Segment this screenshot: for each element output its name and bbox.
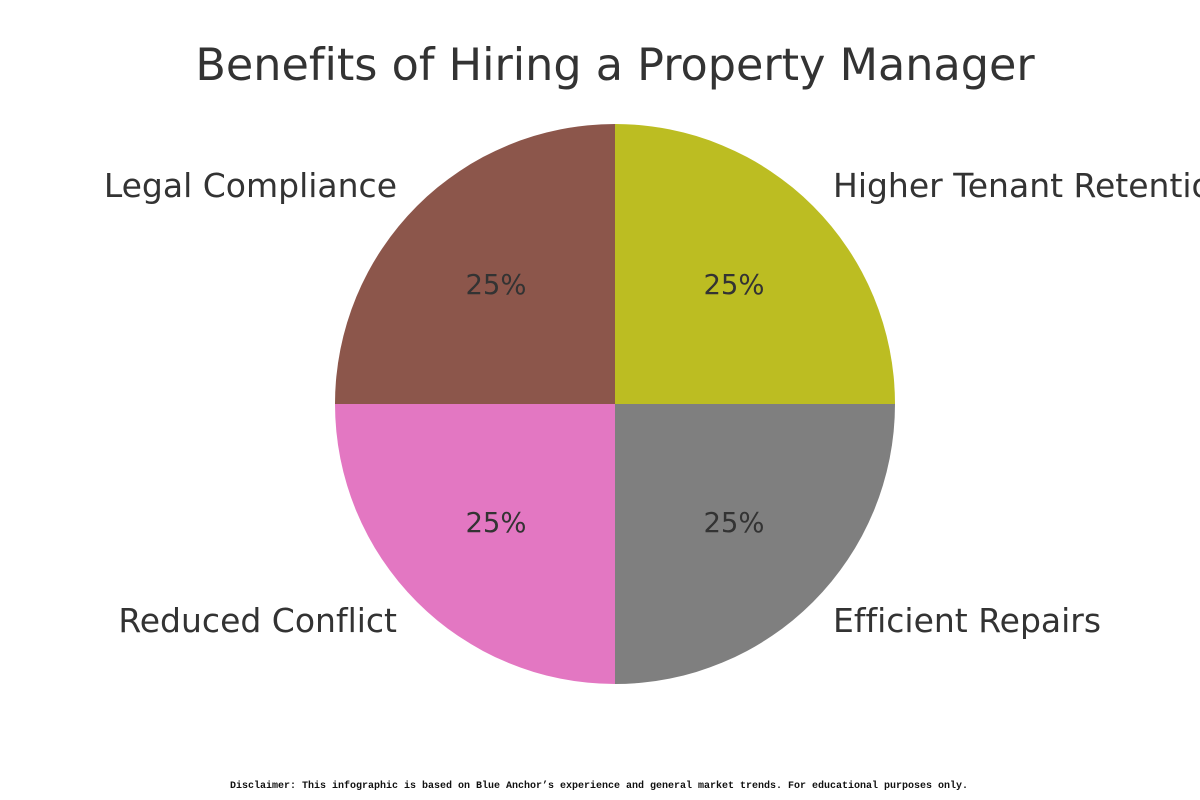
percent labels (465, 269, 765, 539)
slice: Legal Compliance (335, 124, 615, 404)
title: Benefits of Hiring a Property Manager (195, 40, 1035, 91)
disclaimer: Disclaimer: This infographic is based on Blue Anchor’s experience and general market trends. For educational purposes only. (230, 780, 968, 792)
slice: Reduced Conflict (335, 404, 615, 684)
percent labels: 25% (703, 507, 765, 539)
percent labels: 25% (465, 507, 527, 539)
pie chart (335, 124, 895, 684)
percent labels: 25% (465, 269, 527, 301)
category labels (104, 166, 1200, 640)
category labels: Efficient Repairs (833, 601, 1101, 640)
slice: Efficient Repairs (615, 404, 895, 684)
percent labels: 25% (703, 269, 765, 301)
category labels: Reduced Conflict (118, 601, 397, 640)
slice: Higher Tenant Retention (615, 124, 895, 404)
category labels: Legal Compliance (104, 166, 397, 205)
